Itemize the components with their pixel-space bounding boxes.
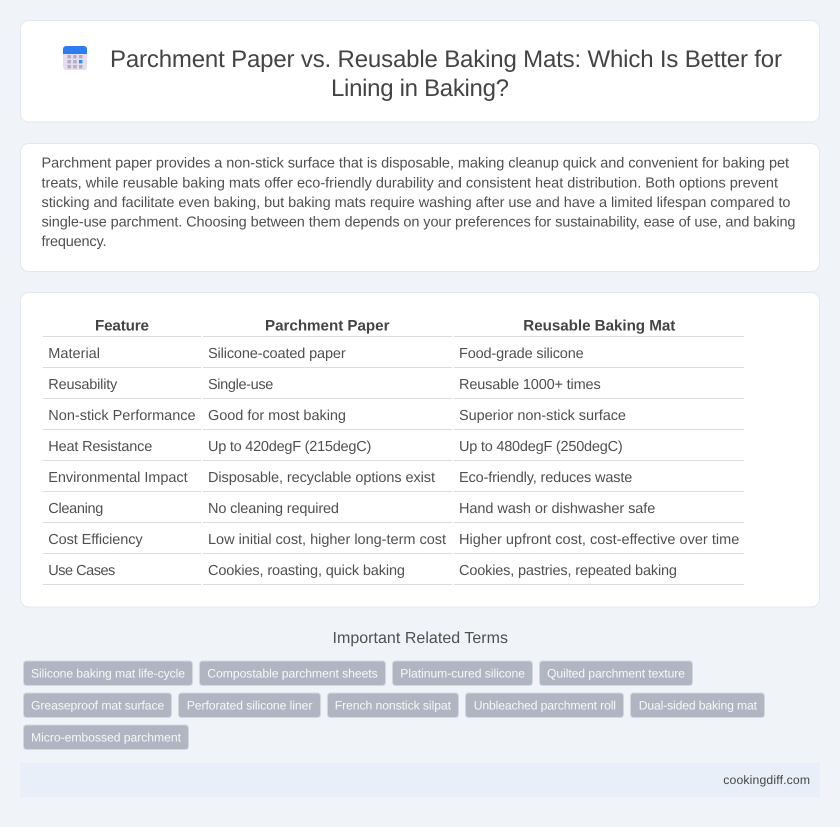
- tag: silicone baking mat life-cycle: Silicone baking mat life-cycle: [31, 666, 185, 680]
- row: cost efficiency: Cost Efficiency: [48, 532, 143, 548]
- row: cost efficiency: Higher upfront cost, cost-effective over time: [459, 532, 739, 548]
- tag: greaseproof mat surface: Greaseproof mat surface: [31, 698, 165, 712]
- row: environmental impact: Eco-friendly, reduces waste: [459, 470, 632, 486]
- tag: unbleached parchment roll: [466, 693, 624, 718]
- tag: silicone baking mat life-cycle: [24, 661, 192, 686]
- tag: perforated silicone liner: Perforated silicone liner: [187, 698, 312, 712]
- title: Parchment Paper vs. Reusable Baking Mats: Which Is Better for: [110, 46, 782, 73]
- row: non-stick performance: Good for most baking: [208, 408, 346, 424]
- row: environmental impact: Environmental Impact: [48, 470, 188, 486]
- tag: perforated silicone liner: [178, 693, 320, 718]
- row: non-stick performance: Non-stick Performance: [48, 408, 196, 424]
- tag: platinum-cured silicone: Platinum-cured silicone: [400, 666, 525, 680]
- row: environmental impact: Disposable, recyclable options exist: [208, 470, 435, 486]
- row: reusability: Reusable 1000+ times: [459, 377, 601, 393]
- tag: greaseproof mat surface: [24, 693, 172, 718]
- row: material: Material: [48, 346, 100, 362]
- row: material: Food-grade silicone: [459, 346, 584, 362]
- tag: quilted parchment texture: Quilted parchment texture: [547, 666, 685, 680]
- row: non-stick performance: [48, 408, 626, 424]
- row: reusability: Single-use: [208, 377, 273, 393]
- summary paragraph: Parchment paper provides a non-stick surface that is disposable, making cleanup quick and convenient for baking pet: [42, 156, 789, 172]
- tag: french nonstick silpat: French nonstick silpat: [335, 698, 452, 712]
- row: heat resistance: [48, 439, 623, 455]
- summary paragraph: [42, 156, 796, 250]
- table header: [95, 318, 675, 334]
- footer source: cookingdiff.com: [723, 773, 810, 787]
- row: non-stick performance: Superior non-stick surface: [459, 408, 626, 424]
- row: heat resistance: Up to 480degF (250degC): [459, 439, 623, 455]
- icon: calendar: [63, 46, 87, 70]
- row: use cases: Cookies, pastries, repeated baking: [459, 563, 677, 579]
- title: Lining in Baking?: [331, 75, 509, 102]
- tag: unbleached parchment roll: Unbleached parchment roll: [474, 698, 616, 712]
- summary paragraph: single-use parchment. Choosing between them depends on your preferences for sustainability, ease of use, and baking: [42, 214, 796, 230]
- table row lines: [43, 336, 744, 585]
- table header: Feature: [95, 318, 149, 334]
- row: cleaning: Hand wash or dishwasher safe: [459, 501, 655, 517]
- row: use cases: Use Cases: [48, 563, 115, 579]
- summary paragraph: sticking and facilitate even baking, but baking mats require washing after use and have a limited lifespan compared to: [42, 195, 790, 211]
- row: cost efficiency: [48, 532, 739, 548]
- row: heat resistance: Up to 420degF (215degC): [208, 439, 371, 455]
- tag: dual-sided baking mat: Dual-sided baking mat: [639, 698, 758, 712]
- summary paragraph: frequency.: [42, 234, 106, 250]
- row: material: Silicone-coated paper: [208, 346, 346, 362]
- tag list: [24, 661, 764, 750]
- row: heat resistance: Heat Resistance: [48, 439, 152, 455]
- heading: important related terms: Important Related Terms: [332, 630, 508, 647]
- tag: quilted parchment texture: [540, 661, 692, 686]
- tag: compostable parchment sheets: Compostable parchment sheets: [207, 666, 378, 680]
- row: environmental impact: [48, 470, 632, 486]
- row: cleaning: [48, 501, 655, 517]
- row: use cases: Cookies, roasting, quick baking: [208, 563, 405, 579]
- row: cost efficiency: Low initial cost, higher long-term cost: [208, 532, 446, 548]
- tag: french nonstick silpat: [328, 693, 458, 718]
- tag: micro-embossed parchment: Micro-embossed parchment: [31, 730, 182, 744]
- tag: compostable parchment sheets: [200, 661, 386, 686]
- panel: summary text: [20, 144, 820, 272]
- table header: Reusable Baking Mat: [523, 318, 675, 334]
- row: reusability: [48, 377, 601, 393]
- table header: Parchment Paper: [265, 318, 390, 334]
- tag: platinum-cured silicone: [392, 661, 532, 686]
- row: material: [48, 346, 584, 362]
- footer bar: [20, 763, 820, 797]
- title: [110, 46, 782, 102]
- row: use cases: [48, 563, 677, 579]
- row: cleaning: No cleaning required: [208, 501, 339, 517]
- row: reusability: Reusability: [48, 377, 118, 393]
- row: cleaning: Cleaning: [48, 501, 103, 517]
- tag: dual-sided baking mat: [630, 693, 764, 718]
- panel: title header: [20, 20, 820, 122]
- summary paragraph: treats, while reusable baking mats offer eco-friendly durability and consistent heat distribution. Both options prevent: [42, 175, 778, 191]
- panel: comparison table: [20, 292, 820, 607]
- tag: micro-embossed parchment: [24, 725, 188, 750]
